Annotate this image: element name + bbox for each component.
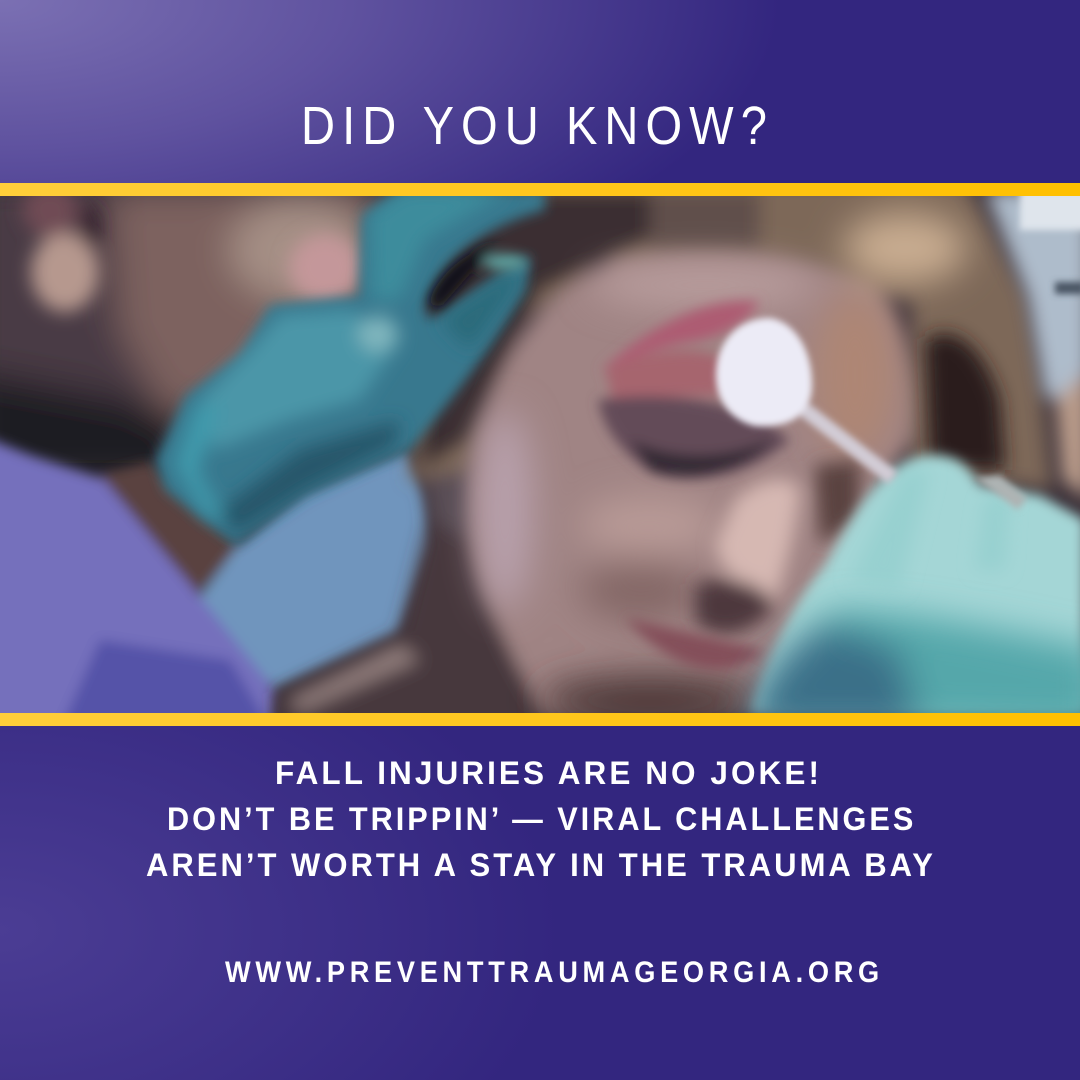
hair shadow bbox=[925, 334, 1005, 470]
top gold divider bbox=[0, 183, 1080, 196]
woman's face bbox=[472, 255, 911, 713]
shoulder and neck bbox=[278, 470, 600, 730]
title: DID YOU KNOW? bbox=[301, 96, 774, 156]
bruised eye bbox=[598, 396, 790, 479]
right glove bbox=[752, 455, 1080, 713]
lips bbox=[625, 618, 765, 670]
message line 3: AREN’T WORTH A STAY IN THE TRAUMA BAY bbox=[146, 847, 936, 883]
message line 2: DON’T BE TRIPPIN’ — VIRAL CHALLENGES bbox=[167, 801, 916, 837]
wall with charts bbox=[985, 190, 1080, 400]
soft tones of doctor's head bbox=[0, 180, 390, 480]
bottom gold divider bbox=[0, 713, 1080, 726]
chart details on wall bbox=[1020, 190, 1080, 230]
woman's hair bbox=[410, 180, 1052, 490]
nose bbox=[715, 479, 800, 610]
ring instrument bbox=[975, 475, 1027, 510]
dark side of face bbox=[815, 460, 860, 545]
website URL: WWW.PREVENTTRAUMAGEORGIA.ORG bbox=[225, 956, 884, 989]
message line 1: FALL INJURIES ARE NO JOKE! bbox=[275, 755, 822, 791]
wound bbox=[600, 301, 760, 372]
message text bbox=[146, 755, 936, 883]
doctor's ear and cheek bbox=[31, 232, 99, 312]
gap between fingers bbox=[428, 242, 498, 308]
arm bbox=[100, 462, 240, 595]
scrubs bbox=[0, 435, 275, 730]
wall bbox=[190, 450, 432, 688]
right hand behind bbox=[1055, 370, 1080, 500]
swab head bbox=[716, 318, 812, 426]
photo: clinician treating head wound bbox=[0, 196, 1080, 713]
left glove bbox=[155, 190, 545, 545]
swab stick bbox=[805, 410, 893, 478]
